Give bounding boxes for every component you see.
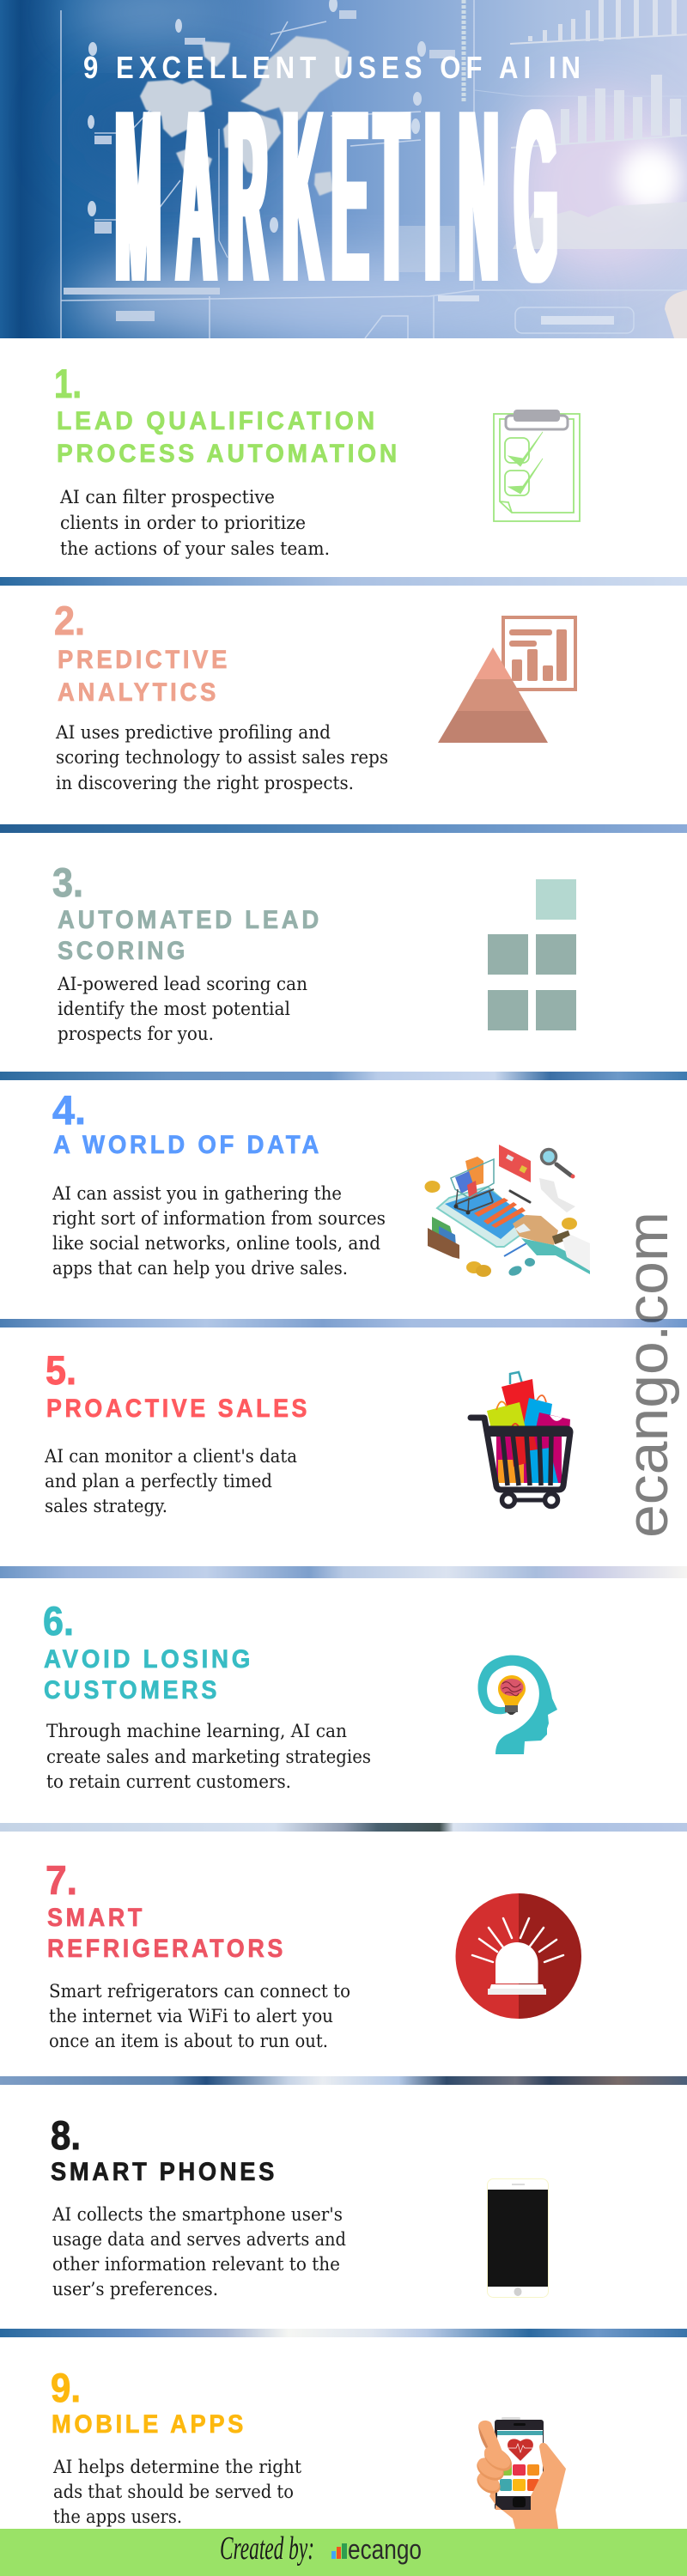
icon: pyramid and report: [438, 617, 575, 743]
heading 2: PREDICTIVE: [58, 646, 230, 674]
body text 6: to retain current customers.: [46, 1771, 291, 1792]
panel 9: mobile apps: [51, 2365, 566, 2529]
number 1: 1.: [54, 361, 82, 406]
heading 5: PROACTIVE SALES: [46, 1394, 310, 1423]
number 9: 9.: [51, 2365, 81, 2410]
number 5: 5.: [46, 1347, 76, 1393]
body text 2: scoring technology to assist sales reps: [56, 747, 388, 768]
heading 3: AUTOMATED LEAD: [58, 906, 322, 934]
icon: red siren: [455, 1893, 581, 2019]
divider band 6: [0, 1823, 687, 1832]
heading 1 second line: PROCESS AUTOMATION: [57, 440, 400, 468]
body text 9: the apps users.: [53, 2506, 182, 2527]
divider band 1: [0, 577, 687, 586]
divider band 4: [0, 1319, 687, 1327]
heading 2 second line: ANALYTICS: [58, 678, 219, 707]
body text 9: AI helps determine the right: [52, 2457, 302, 2477]
number 3: 3.: [52, 860, 83, 905]
body text 7: Smart refrigerators can connect to: [49, 1981, 350, 2002]
heading 4: A WORLD OF DATA: [53, 1131, 322, 1159]
body text 9: ads that should be served to: [53, 2482, 294, 2502]
panel 6: avoid losing customers: [43, 1598, 557, 1792]
body text 1: [59, 487, 330, 559]
heading 7: SMART: [47, 1904, 145, 1932]
panel 5: proactive sales: [44, 1347, 570, 1516]
heading 7 second line: REFRIGERATORS: [47, 1935, 286, 1963]
body text 1: the actions of your sales team.: [60, 538, 330, 559]
body text 2: in discovering the right prospects.: [56, 773, 354, 793]
body text 3: [57, 974, 307, 1044]
ecango logo: ecango: [348, 2534, 422, 2565]
divider band 8: [0, 2329, 687, 2337]
body text 4: [52, 1183, 386, 1279]
body text 1: AI can filter prospective: [59, 487, 275, 507]
body text 1: clients in order to prioritize: [60, 513, 306, 533]
created by script text: Created by:: [220, 2530, 314, 2567]
body text 4: AI can assist you in gathering the: [52, 1183, 342, 1204]
ecango logo: [331, 2534, 422, 2565]
number 8: 8.: [51, 2112, 81, 2158]
body text 7: [49, 1981, 350, 2051]
icon: shopping cart with bags: [471, 1372, 570, 1506]
heading 9: MOBILE APPS: [52, 2410, 246, 2439]
divider band 2: [0, 824, 687, 833]
body text 8: other information relevant to the: [52, 2254, 340, 2275]
body text 6: [46, 1721, 371, 1792]
panel 7: smart refrigerators: [46, 1857, 581, 2051]
icon: hand holding phone: [473, 2417, 566, 2529]
body text 4: apps that can help you drive sales.: [52, 1258, 348, 1279]
hero background photo: data dashboard: [0, 0, 687, 343]
body text 5: AI can monitor a client's data: [44, 1446, 297, 1467]
panel 1: lead qualification: [54, 361, 580, 559]
body text 3: identify the most potential: [58, 999, 290, 1019]
body text 4: like social networks, online tools, and: [52, 1233, 380, 1254]
hero header panel: [0, 0, 687, 343]
footer bar: [0, 2529, 687, 2576]
heading 8: SMART PHONES: [51, 2158, 277, 2186]
icon: smartphone: [488, 2179, 548, 2298]
body text 3: AI-powered lead scoring can: [57, 974, 307, 994]
number 6: 6.: [43, 1598, 74, 1643]
big title word: marketing: MARKETING: [116, 59, 557, 333]
heading 6: AVOID LOSING: [44, 1645, 253, 1674]
panel 2: predictive analytics: [54, 598, 575, 793]
divider band 7: [0, 2076, 687, 2085]
heading 3 second line: SCORING: [58, 937, 188, 965]
panel 8: smart phones: [51, 2112, 548, 2300]
body text 7: once an item is about to run out.: [49, 2031, 328, 2051]
icon: head with lightbulb brain: [477, 1656, 557, 1754]
number 2: 2.: [54, 598, 85, 643]
divider band 5: [0, 1566, 687, 1578]
body text 6: Through machine learning, AI can: [46, 1721, 347, 1741]
body text 4: right sort of information from sources: [52, 1208, 386, 1229]
body text 8: usage data and serves adverts and: [52, 2229, 346, 2250]
body text 8: user’s preferences.: [52, 2279, 218, 2300]
body text 7: the internet via WiFi to alert you: [49, 2006, 333, 2026]
body text 2: AI uses predictive profiling and: [55, 722, 331, 743]
body text 8: [52, 2204, 346, 2300]
body text 5: and plan a perfectly timed: [45, 1471, 272, 1492]
body text 8: AI collects the smartphone user's: [52, 2204, 343, 2225]
title line: 9 excellent uses of AI in: 9 EXCELLENT USES OF AI IN: [83, 50, 586, 85]
body text 3: prospects for you.: [58, 1024, 214, 1044]
body text 9: [52, 2457, 302, 2527]
body text 5: [44, 1446, 297, 1516]
panel 4: a world of data: [52, 1087, 590, 1279]
divider band 3: [0, 1072, 687, 1080]
icon: grid of squares: [488, 879, 576, 1030]
body text 2: [55, 722, 388, 793]
heading 6 second line: CUSTOMERS: [44, 1676, 220, 1704]
body text 6: create sales and marketing strategies: [46, 1747, 371, 1767]
number 7: 7.: [46, 1857, 77, 1903]
number 4: 4.: [52, 1087, 86, 1133]
body text 5: sales strategy.: [45, 1496, 167, 1516]
icon: isometric online shopping scene: [424, 1145, 590, 1278]
rotated side text: ecango.com: ecango.com: [615, 1212, 680, 1538]
panel 3: automated lead scoring: [52, 860, 576, 1044]
icon: clipboard with checkmarks: [494, 410, 580, 521]
heading 1: LEAD QUALIFICATION: [57, 407, 378, 435]
